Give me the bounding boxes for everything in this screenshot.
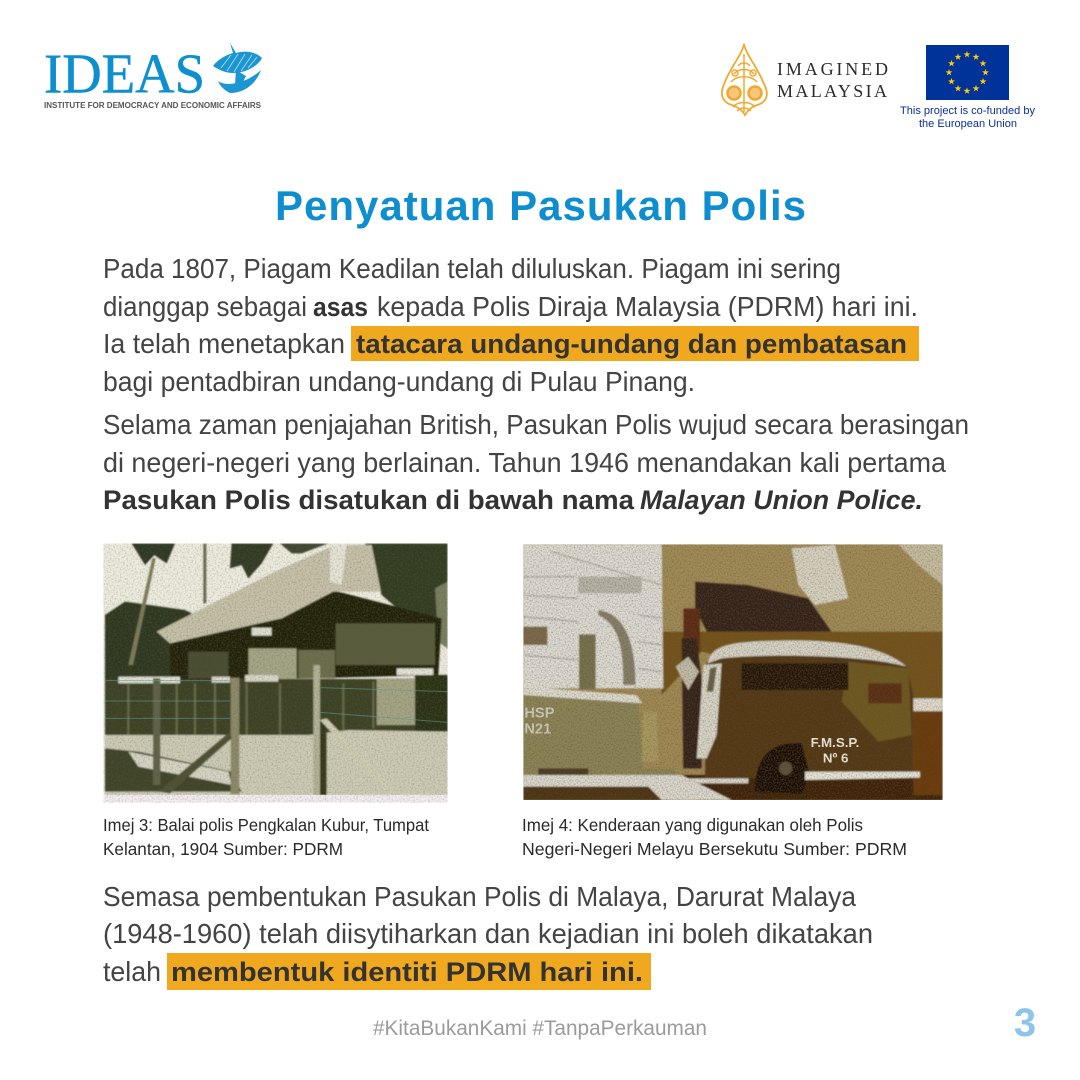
- caption: image 4: Negeri-Negeri Melayu Bersekutu Sumber: PDRM: [522, 839, 907, 859]
- icon: IDEAS bird: [213, 43, 262, 93]
- foliage background: [662, 544, 943, 632]
- left van: [523, 692, 675, 778]
- funding note: This project is co-funded by: [900, 105, 1035, 117]
- hashtags: #KitaBukanKami #TanpaPerkauman: [373, 1017, 707, 1040]
- photo: police vehicles: N21: [524, 722, 551, 738]
- text block: intro paragraph: Pada 1807, Piagam Keadilan telah diluluskan. Piagam ini sering: [103, 253, 841, 284]
- EU flag: [926, 45, 1009, 100]
- posts and rails: [231, 678, 239, 794]
- text block: emergency paragraph: Semasa pembentukan Pasukan Polis di Malaya, Darurat Malaya: [103, 881, 857, 912]
- thatched roof: [157, 545, 381, 643]
- text block: colonial era paragraph: Malayan Union Police.: [640, 485, 923, 515]
- caption: image 3: [103, 815, 429, 859]
- text block: intro paragraph: dianggap sebagai: [103, 291, 307, 322]
- fence wires: [105, 681, 448, 722]
- text block: intro paragraph: [103, 253, 919, 397]
- icon: wayang ornament: [722, 45, 767, 115]
- photo: police vehicles: [523, 544, 943, 800]
- page number: 3: [1014, 1001, 1036, 1045]
- wheel: [755, 743, 810, 793]
- van plate: Nº 6: [823, 750, 848, 765]
- tree trunk and figure: [683, 608, 700, 652]
- logo: Imagined Malaysia: MALAYSIA: [777, 81, 887, 101]
- caption: image 4: Imej 4: Kenderaan yang digunakan oleh Polis: [522, 815, 863, 835]
- text block: emergency paragraph: [103, 881, 873, 990]
- van plate: F.M.S.P.: [811, 735, 859, 750]
- highlight: procedures: tatacara undang-undang dan pembatasan: [356, 329, 907, 359]
- fence slats: [128, 682, 373, 738]
- logo: Imagined Malaysia: [722, 45, 888, 115]
- logo: EU flag and funding note: [900, 45, 1035, 130]
- woven wall: [336, 623, 435, 665]
- logo text: IMAGINED: [777, 59, 888, 79]
- photo: police vehicles: HSP: [524, 706, 555, 722]
- ground: [105, 730, 448, 795]
- logo tagline: INSTITUTE FOR DEMOCRACY AND ECONOMIC AFFAIRS: [44, 101, 262, 110]
- title: Penyatuan Pasukan Polis: [275, 182, 806, 229]
- caption: image 3: Kelantan, 1904 Sumber: PDRM: [103, 839, 343, 859]
- text block: emergency paragraph: telah: [103, 956, 161, 987]
- logo wordmark: IDEAS: [44, 44, 205, 106]
- funding note: the European Union: [919, 118, 1017, 130]
- text block: colonial era paragraph: di negeri-negeri yang berlainan. Tahun 1946 menandakan kali pertama: [103, 447, 947, 478]
- highlight: identity: membentuk identiti PDRM hari ini.: [171, 957, 643, 987]
- dark interior under roof: [170, 590, 442, 682]
- main van body: [705, 655, 913, 778]
- text block: colonial era paragraph: Selama zaman penjajahan British, Pasukan Polis wujud secara berasingan: [103, 409, 969, 440]
- caption: image 4: [522, 815, 907, 859]
- fence wall: [105, 679, 448, 737]
- building: [523, 544, 663, 688]
- text block: intro paragraph: asas: [313, 292, 368, 322]
- text block: intro paragraph: Ia telah menetapkan: [103, 328, 345, 359]
- text block: colonial era paragraph: [103, 409, 969, 515]
- photo: police station: [103, 543, 448, 803]
- text block: emergency paragraph: (1948-1960) telah diisytiharkan dan kejadian ini boleh dikatakan: [103, 918, 873, 949]
- text block: colonial era paragraph: Pasukan Polis disatukan di bawah nama: [103, 485, 634, 515]
- caption: image 3: Imej 3: Balai polis Pengkalan Kubur, Tumpat: [103, 815, 429, 835]
- trees and palms: [104, 600, 192, 680]
- text block: intro paragraph: kepada Polis Diraja Malaysia (PDRM) hari ini.: [377, 291, 918, 322]
- logo: IDEAS: [44, 43, 262, 110]
- text block: intro paragraph: bagi pentadbiran undang-undang di Pulau Pinang.: [103, 366, 695, 397]
- ground: [523, 775, 748, 800]
